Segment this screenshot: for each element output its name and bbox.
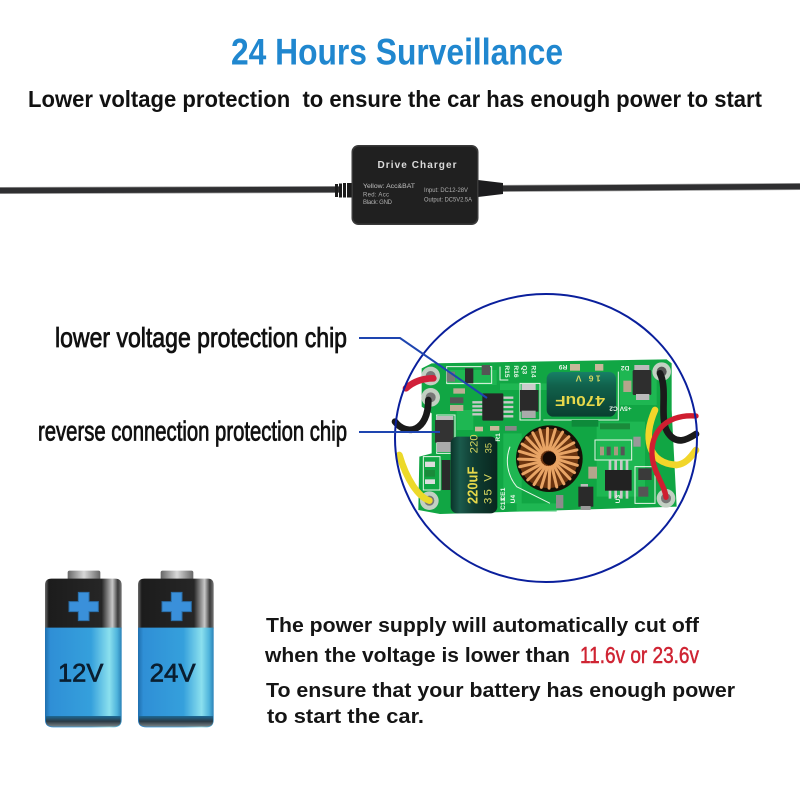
battery 12V — [45, 571, 122, 727]
capacitor 220uF: 220 — [468, 434, 480, 453]
small labels: C13 — [500, 497, 507, 510]
wire colours: red: Red: Acc — [363, 192, 389, 198]
small labels: R9 — [559, 363, 567, 370]
silkscreen outlines — [423, 367, 655, 503]
battery icons — [45, 571, 214, 727]
arrow: reverse connection chip — [359, 431, 440, 433]
toroid coil — [516, 425, 583, 492]
cable: right — [498, 186, 800, 188]
wires — [395, 373, 696, 501]
small labels: D2 — [621, 364, 629, 371]
small labels: U4 — [510, 495, 517, 503]
wire colours: Yellow: Acc&BAT — [363, 183, 415, 190]
small labels: R16 — [512, 365, 519, 378]
charger body — [352, 145, 478, 225]
description text block — [264, 615, 735, 728]
MOSFET — [520, 384, 538, 418]
label: lower voltage protection chip: lower voltage protection chip — [55, 322, 347, 353]
red voltage values: 11.6v or 23.6v — [580, 642, 699, 668]
strain relief: right — [478, 180, 503, 197]
small labels: U3 — [615, 495, 622, 503]
wire colours: black: Black: GND — [363, 200, 393, 206]
capacitor 470uF: 16 V — [575, 373, 601, 383]
capacitor 470uF — [547, 372, 616, 417]
output rating: Output: DC5V2.5A — [424, 198, 472, 204]
capacitor 220uF — [451, 434, 497, 513]
subtitle: Lower voltage protection to ensure the car has enough power to start — [28, 86, 762, 112]
strain relief: left — [335, 183, 353, 198]
small labels — [495, 363, 632, 510]
lower voltage protection chip — [472, 393, 513, 421]
line 1: The power supply will automatically cut off — [266, 615, 699, 637]
capacitor 220uF: 35 V — [483, 474, 495, 504]
small labels: R14 — [529, 365, 536, 378]
label: reverse connection protection chip: reverse connection protection chip — [38, 416, 347, 446]
IC U4 — [578, 484, 593, 510]
capacitor 220uF: 220uF — [465, 467, 481, 504]
IC U3 — [605, 461, 632, 499]
small parts — [425, 364, 652, 508]
line 3: To ensure that your battery has enough power — [266, 680, 735, 702]
title: 24 Hours Surveillance — [231, 32, 563, 72]
input rating: Input: DC12-28V — [424, 188, 468, 194]
circuit board photo — [395, 359, 696, 514]
small labels: R1 — [495, 433, 502, 442]
24V text: 24V — [150, 660, 196, 687]
charger label: Drive Charger — [378, 160, 457, 171]
drive charger module with cable — [0, 145, 800, 225]
pads — [421, 367, 440, 385]
reverse connection protection chip — [435, 416, 454, 452]
plus icon — [162, 592, 191, 621]
small labels: +5V C2 — [609, 405, 632, 412]
battery 24V — [138, 571, 214, 727]
small labels: CE1 — [500, 487, 507, 501]
line 4: to start the car. — [267, 706, 424, 728]
small labels: Q3 — [521, 365, 528, 375]
diode D2 — [633, 365, 651, 400]
copper patches — [447, 370, 657, 512]
capacitor 470uF: 470uF — [555, 392, 605, 408]
magnifier circle — [395, 294, 697, 582]
plus icon — [69, 592, 98, 621]
12V text: 12V — [58, 660, 104, 687]
capacitor 220uF: 35 — [484, 443, 494, 453]
PCB — [418, 359, 677, 514]
small labels: R15 — [503, 365, 510, 378]
line 2: when the voltage is lower than — [264, 645, 570, 667]
cable: left — [0, 190, 340, 191]
arrow: lower voltage chip — [359, 338, 487, 398]
